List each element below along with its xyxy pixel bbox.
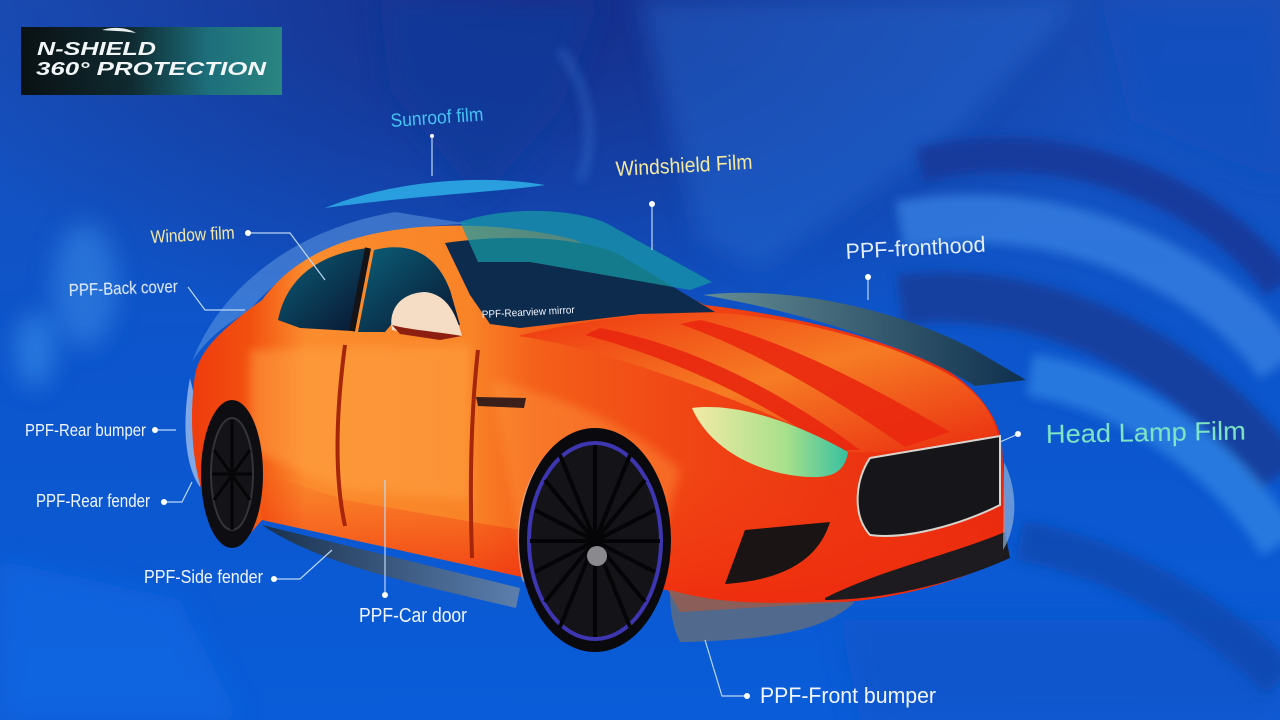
label: PPF-Rear fender: PPF-Rear fender [36, 491, 150, 511]
logo badge: N-SHIELD [37, 39, 156, 59]
label: PPF-Car door: PPF-Car door [359, 605, 467, 627]
label: Windshield Film: Windshield Film [615, 151, 753, 181]
logo badge: 360° PROTECTION [36, 59, 267, 79]
side windows [278, 247, 460, 332]
label: PPF-Front bumper: PPF-Front bumper [760, 683, 936, 708]
car body [192, 226, 1006, 612]
hood stripes [585, 328, 860, 450]
leader dots [152, 134, 1021, 699]
label: Head Lamp Film: Head Lamp Film [1046, 416, 1246, 449]
side fender film panel [262, 525, 520, 608]
rear bumper film panel [185, 378, 205, 487]
side vents [476, 397, 526, 408]
windshield film panel [460, 211, 712, 290]
lower body shading [255, 470, 1003, 612]
door reflection [250, 345, 470, 500]
front edge film panel [1003, 462, 1014, 550]
label: PPF-Back cover: PPF-Back cover [68, 276, 178, 300]
hood film panel [703, 293, 1026, 386]
leader lines [154, 136, 1016, 696]
door seams [338, 345, 478, 558]
label: PPF-Rear bumper: PPF-Rear bumper [25, 420, 146, 440]
car [192, 211, 1026, 652]
sunroof film panel [325, 180, 545, 208]
head lamp [692, 407, 848, 477]
front wheel [518, 428, 671, 652]
rearview mirror: PPF-Rearview mirror [482, 304, 575, 321]
label: PPF-Side fender: PPF-Side fender [144, 567, 263, 587]
rearview mirror [391, 292, 575, 340]
rear wheel [201, 400, 263, 548]
lower intake [725, 522, 830, 584]
label: Sunroof film: Sunroof film [390, 105, 484, 132]
front bumper film panel [670, 590, 855, 642]
hood [518, 313, 998, 452]
label: Window film: Window film [150, 223, 235, 247]
grille [858, 436, 1000, 536]
windshield [445, 238, 715, 328]
label: PPF-fronthood: PPF-fronthood [845, 232, 986, 264]
logo badge [21, 27, 282, 95]
back cover film panel [192, 212, 470, 362]
front splitter [825, 532, 1010, 600]
